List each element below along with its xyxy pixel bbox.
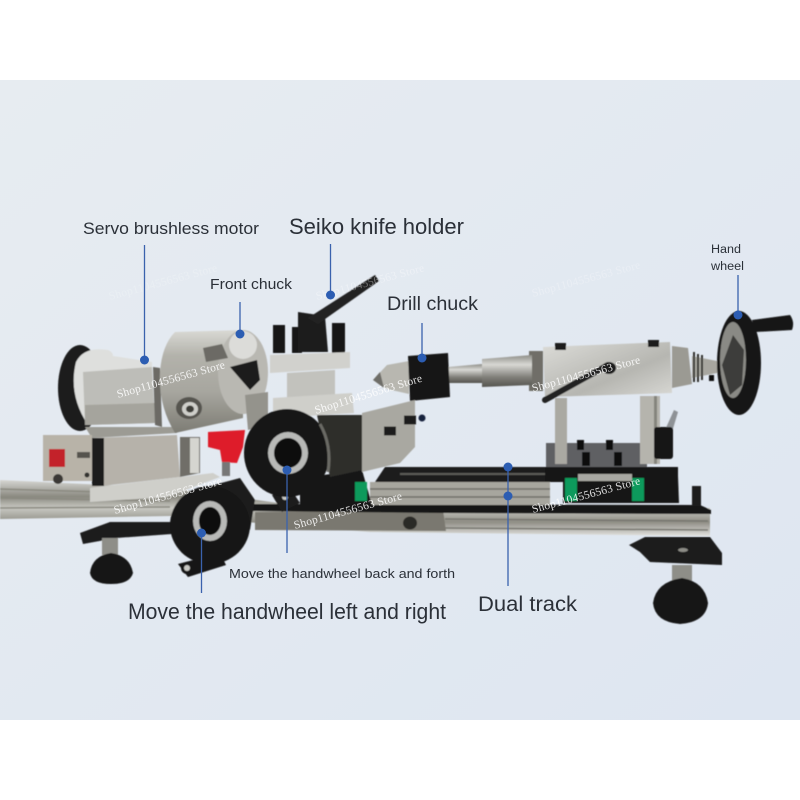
callout: dual track xyxy=(478,462,578,616)
rack xyxy=(255,508,446,531)
control box xyxy=(43,435,92,484)
callout: move the handwheel left and right xyxy=(128,528,446,624)
callout: move the handwheel back and forth xyxy=(229,466,455,581)
watermarks xyxy=(108,259,642,532)
upper handwheel xyxy=(244,409,330,512)
callout: drill chuck: Drill chuck xyxy=(387,294,479,315)
cross slide xyxy=(317,400,426,477)
tailstock lever xyxy=(545,365,608,400)
callout: seiko knife holder xyxy=(289,214,464,300)
watermarks: Shop1104556563 Store xyxy=(313,373,424,417)
watermarks: Shop1104556563 Store xyxy=(531,259,642,300)
motor disc and housing xyxy=(58,345,180,438)
callout: drill chuck xyxy=(387,294,479,362)
linear rail xyxy=(370,482,550,505)
posts and clamp xyxy=(555,398,567,464)
callout: front chuck: Front chuck xyxy=(210,277,293,293)
tool post xyxy=(270,275,379,418)
background panel xyxy=(0,80,800,720)
handwheel assembly xyxy=(672,311,793,415)
watermarks: Shop1104556563 Store xyxy=(116,359,227,401)
main aluminium rail xyxy=(0,480,710,536)
cross slide dark lower section xyxy=(300,470,372,508)
tailstock block xyxy=(543,342,672,397)
callout: move the handwheel back and forth: Move the handwheel back and forth xyxy=(229,566,455,581)
tailstock carriage xyxy=(545,440,701,506)
callout: hand wheel: Hand xyxy=(711,244,741,256)
watermarks: Shop1104556563 Store xyxy=(293,490,404,532)
lower handwheel xyxy=(170,478,255,577)
watermarks: Shop1104556563 Store xyxy=(113,475,224,517)
callout: dual track: Dual track xyxy=(478,593,578,616)
motor base xyxy=(90,435,220,502)
right foot xyxy=(629,537,722,624)
callout: move the handwheel left and right: Move the handwheel left and right xyxy=(128,599,446,624)
red clamp handle xyxy=(208,430,245,476)
callout: servo brushless motor: Servo brushless motor xyxy=(83,220,260,238)
callout: front chuck xyxy=(210,277,293,338)
callout: seiko knife holder: Seiko knife holder xyxy=(289,214,464,239)
callout: hand wheel: wheel xyxy=(710,261,744,273)
callout: servo brushless motor xyxy=(83,220,260,364)
left foot xyxy=(80,522,176,584)
three jaw chuck xyxy=(160,330,268,433)
watermarks: Shop1104556563 Store xyxy=(315,262,426,303)
callout: hand wheel xyxy=(710,244,744,320)
lathe machine illustration xyxy=(0,275,793,624)
black base plate xyxy=(250,504,711,514)
watermarks: Shop1104556563 Store xyxy=(108,262,219,303)
watermarks: Shop1104556563 Store xyxy=(531,354,642,395)
drill chuck body xyxy=(373,353,450,401)
quill and spindle xyxy=(448,351,543,391)
watermarks: Shop1104556563 Store xyxy=(531,475,642,516)
